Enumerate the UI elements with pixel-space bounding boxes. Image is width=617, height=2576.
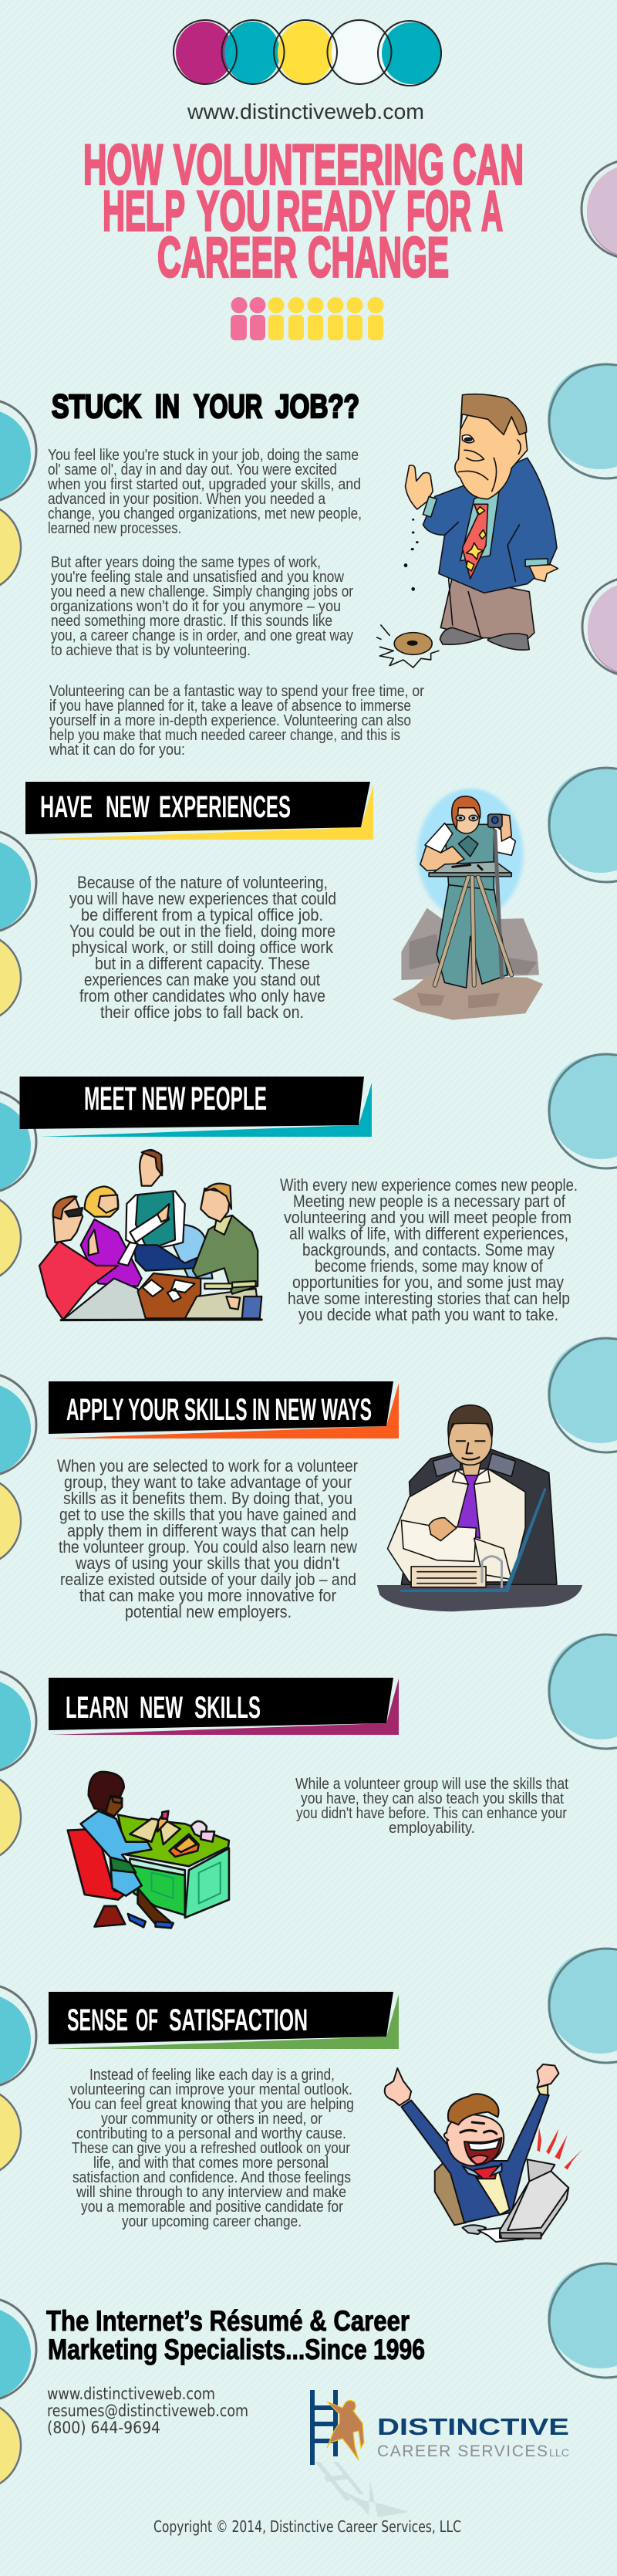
decorative circles: left pair 2 (0, 830, 36, 1026)
title: FOR (406, 181, 471, 242)
text block: sense of satisfaction (68, 2067, 354, 2230)
text block: intro paragraph 1: You feel like you're stuck in your job, doing the same (48, 447, 359, 464)
section bar: meet new people (20, 1077, 372, 1137)
text block: sense of satisfaction: your community or others in need, or (101, 2111, 322, 2128)
contact details: www.distinctiveweb.com (47, 2385, 215, 2403)
contact details: resumes@distinctiveweb.com (47, 2402, 248, 2420)
text block: have new experiences: You could be out in the field, doing more (69, 921, 335, 941)
text block: intro paragraph 2: to achieve that is by volunteering. (51, 642, 251, 659)
title: HELP (103, 181, 185, 242)
text block: learn new skills: employability. (389, 1820, 475, 1837)
text block: intro paragraph 2: organizations won't do it for you anymore – you (50, 598, 341, 615)
title: A (481, 181, 503, 242)
text block: intro paragraph 2: But after years doing the same types of work, (51, 554, 321, 571)
text block: meet new people: all walks of life, with different experiences, (289, 1224, 568, 1243)
section heading: apply your skills: APPLY YOUR SKILLS IN NEW WAYS (66, 1393, 372, 1427)
decorative circle: right teal 5 (548, 1635, 617, 1749)
contact details: (800) 644-9694 (47, 2419, 160, 2437)
wordmark: llc: LLC (549, 2446, 569, 2459)
footer heading: tagline: Marketing Specialists...Since 1996 (48, 2334, 425, 2365)
text block: have new experiences (69, 873, 336, 1022)
text block: meet new people (280, 1175, 578, 1324)
text block: learn new skills: you didn't have before. This can enhance your (296, 1805, 567, 1822)
text block: have new experiences: but in a different capacity. These (95, 954, 310, 973)
section heading: meet new people: MEET NEW PEOPLE (84, 1080, 267, 1117)
text block: intro paragraph 3: Volunteering can be a fantastic way to spend your free time, or (49, 683, 424, 700)
logo: distinctive career services (310, 2390, 569, 2517)
title: CAREER (157, 227, 297, 289)
illustration: cheering man at computer (385, 2064, 582, 2242)
text block: meet new people: backgrounds, and contacts. Some may (302, 1240, 555, 1259)
decorative circle: right mauve 1 (582, 160, 617, 259)
illustration: sad man dropping a donut (377, 394, 558, 668)
section bar: have new experiences (25, 782, 373, 840)
text block: have new experiences: physical work, or still doing office work (72, 938, 334, 957)
section bar: learn new skills (49, 1678, 399, 1735)
heading: stuck in your job: STUCK (52, 388, 141, 425)
text block: apply your skills: get to use the skills that you have gained and (59, 1505, 356, 1524)
text block: intro paragraph 1: ol' same ol', day in and day out. You were excited (48, 461, 337, 478)
text block: intro paragraph 2: you're feeling stale and unsatisfied and you know (51, 569, 344, 586)
text block: meet new people: become friends, some may know of (315, 1256, 544, 1276)
text block: sense of satisfaction: life, and with that comes more personal (93, 2155, 329, 2172)
text block: intro paragraph 2: you need a new challenge. Simply changing jobs or (51, 583, 353, 600)
decorative circles: left pair 5 (0, 1669, 36, 1866)
text block: apply your skills: apply them in different ways that can help (67, 1521, 349, 1540)
decorative circle: right teal 2 (548, 768, 617, 882)
wordmark: distinctive: DISTINCTIVE (377, 2413, 569, 2440)
text block: intro paragraph 2: need something more drastic. If this sounds like (51, 613, 332, 630)
title: READY (276, 181, 395, 242)
decorative circle: right teal 6 (548, 1949, 617, 2063)
text block: apply your skills (57, 1456, 358, 1621)
text block: meet new people: Meeting new people is a necessary part of (293, 1192, 566, 1211)
section heading: sense of satisfaction: SENSE (67, 2003, 128, 2037)
title: CAN (453, 134, 524, 196)
title: YOU (197, 181, 271, 242)
icon: row of people (231, 297, 384, 340)
section heading: sense of satisfaction: SATISFACTION (169, 2003, 308, 2037)
text block: intro paragraph 2 (50, 554, 353, 659)
section heading: learn new skills: SKILLS (194, 1691, 261, 1725)
section bar: apply your skills (49, 1381, 399, 1438)
text block: have new experiences: you will have new experiences that could (69, 889, 336, 908)
text block: learn new skills (295, 1776, 568, 1837)
text block: apply your skills: realize existed outside of your daily job – and (60, 1570, 356, 1589)
heading: stuck in your job (52, 388, 359, 425)
section heading: have new experiences: EXPERIENCES (159, 790, 291, 824)
section bar: sense of satisfaction (49, 1992, 399, 2049)
icon: ladder (310, 2390, 338, 2465)
section heading: have new experiences: NEW (106, 790, 150, 824)
text block: intro paragraph 3: what it can do for you: (49, 742, 185, 759)
text block: intro paragraph 1 (47, 447, 362, 537)
text block: sense of satisfaction: volunteering can improve your mental outlook. (70, 2081, 352, 2098)
decorative circles: left pair 3 (0, 1090, 36, 1286)
text block: sense of satisfaction: you a memorable and positive candidate for (81, 2199, 343, 2216)
text block: intro paragraph 1: learned new processes. (48, 520, 181, 537)
illustration: businessman at desk (377, 1405, 582, 1611)
footer heading: tagline (46, 2305, 425, 2365)
text block: intro paragraph 3: yourself in a more in-depth experience. Volunteering can also (49, 712, 411, 729)
text block: have new experiences: their office jobs to fall back on. (100, 1002, 304, 1022)
text block: intro paragraph 2: you, a career change is in order, and one great way (51, 627, 353, 644)
text block: sense of satisfaction: your upcoming career change. (122, 2213, 302, 2230)
text block: have new experiences: Because of the nature of volunteering, (77, 873, 328, 892)
footer heading: tagline: The Internet’s Résumé & Career (46, 2305, 410, 2337)
decorative circle: right teal 4 (548, 1338, 617, 1452)
text block: meet new people: have some interesting stories that can help (288, 1289, 570, 1308)
icon: climbing figure (327, 2400, 364, 2460)
text block: sense of satisfaction: will shine through to any interview and make (76, 2184, 346, 2201)
text block: intro paragraph 1: when you first started out, upgraded your skills, and (47, 476, 361, 493)
text block: apply your skills: skills as it benefits them. By doing that, you (63, 1489, 352, 1508)
decorative circle: right teal 1 (548, 364, 617, 478)
text block: intro paragraph 1: advanced in your position. When you needed a (48, 491, 326, 508)
text block: learn new skills: you have, they can also teach you skills that (301, 1790, 564, 1807)
decorative circles: left pair 7 (0, 2297, 36, 2494)
text block: have new experiences: experiences can make you stand out (84, 970, 320, 989)
illustration: woman working at green desk (68, 1772, 229, 1928)
text block: apply your skills: potential new employers. (125, 1602, 292, 1621)
title: VOLUNTEERING (174, 134, 444, 196)
heading: stuck in your job: YOUR (194, 388, 262, 425)
text block: sense of satisfaction: You can feel great knowing that you are helping (68, 2096, 354, 2113)
icon: ladder reflection (315, 2462, 409, 2517)
title (83, 134, 524, 289)
decorative circles: left pair 4 (0, 1373, 36, 1570)
wordmark: career services: CAREER SERVICES (377, 2442, 548, 2460)
section heading: sense of satisfaction (67, 2003, 308, 2037)
decorative circles: left pair 1 (0, 399, 36, 596)
section heading: sense of satisfaction: OF (136, 2003, 158, 2037)
website url: www.distinctiveweb.com (187, 100, 424, 123)
illustration: surveyor at tripod (393, 789, 543, 1020)
text block: apply your skills: ways of using your skills that you didn't (75, 1553, 339, 1573)
text block: intro paragraph 3: help you make that much needed career change, and this is (49, 727, 400, 744)
decorative circles: left pair 6 (0, 1984, 36, 2181)
text block: intro paragraph 3 (49, 683, 424, 759)
decorative circle: right mauve 2 (582, 577, 617, 676)
title: CHANGE (308, 227, 449, 289)
contact details (47, 2385, 248, 2437)
section heading: have new experiences (40, 790, 291, 824)
text block: sense of satisfaction: Instead of feeling like each day is a grind, (89, 2067, 335, 2084)
text block: learn new skills: While a volunteer group will use the skills that (295, 1776, 568, 1793)
text block: intro paragraph 1: change, you changed organizations, met new people, (48, 505, 362, 522)
text block: have new experiences: be different from a typical office job. (81, 905, 323, 925)
heading: stuck in your job: IN (155, 388, 180, 425)
text block: sense of satisfaction: These can give you a refreshed outlook on your (72, 2140, 350, 2157)
heading: stuck in your job: JOB?? (275, 388, 359, 425)
text block: apply your skills: that can make you more innovative for (79, 1586, 336, 1605)
text block: apply your skills: When you are selected to work for a volunteer (57, 1456, 358, 1476)
text block: intro paragraph 3: if you have planned for it, take a leave of absence to immerse (49, 698, 411, 715)
decorative circle: right teal 3 (548, 1054, 617, 1168)
text block: apply your skills: the volunteer group. You could also learn new (59, 1537, 357, 1557)
text block: meet new people: volunteering and you will meet people from (284, 1208, 571, 1227)
text block: meet new people: opportunities for you, and some just may (292, 1273, 564, 1292)
copyright: Copyright © 2014, Distinctive Career Services, LLC (153, 2517, 461, 2536)
text block: apply your skills: group, they want to take advantage of your (64, 1472, 352, 1492)
section heading: learn new skills: LEARN (66, 1691, 129, 1725)
decorative circle: right teal 7 (548, 2263, 617, 2378)
text block: sense of satisfaction: satisfaction and confidence. And those feelings (72, 2169, 351, 2186)
title: HOW (83, 134, 163, 196)
illustration: group of people talking (39, 1150, 261, 1320)
text block: sense of satisfaction: contributing to a personal and worthy cause. (76, 2125, 346, 2142)
text block: have new experiences: from other candidates who only have (79, 986, 325, 1006)
section heading: learn new skills (66, 1691, 261, 1725)
section heading: have new experiences: HAVE (40, 790, 93, 824)
text block: meet new people: you decide what path you want to take. (298, 1305, 558, 1324)
section heading: learn new skills: NEW (140, 1691, 183, 1725)
logo: five overlapping circles (174, 20, 442, 86)
